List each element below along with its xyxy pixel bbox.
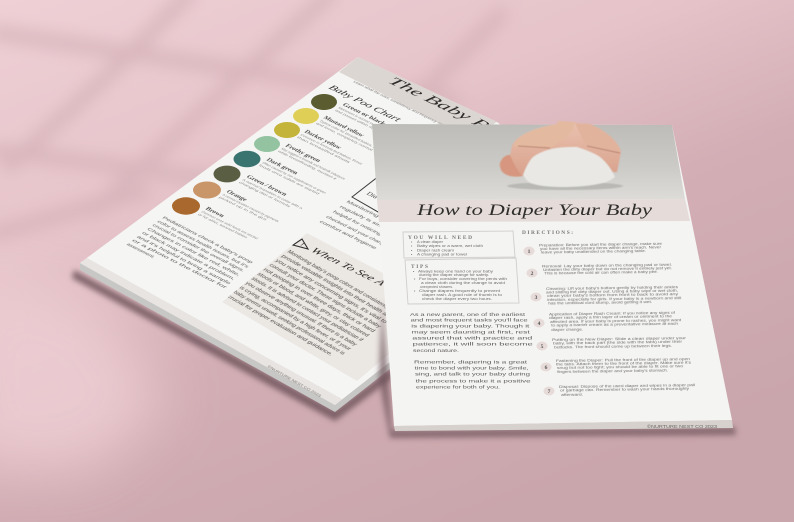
list: tips: • [414, 289, 416, 293]
intro paragraph: and most frequent tasks you'll face [411, 318, 528, 324]
left sheet paragraph: assessment. [125, 242, 156, 260]
left sheet copyright stamp: ©NURTURE NEST CO 2023 [266, 364, 323, 398]
list: tips: a clean cloth during the change to avoid [421, 281, 505, 285]
main title: How to Diaper Your Baby [416, 202, 653, 219]
step 3: and sliding the dirty diaper out. Using a baby wipe or wet cloth, [546, 289, 678, 294]
colour descriptions: Brown [203, 206, 226, 219]
colour descriptions: and passes within 48 hours [334, 109, 387, 135]
colour descriptions: Common once solid foods are started [200, 210, 259, 240]
step 4: diaper rash, apply a thin layer of cream or ointment to the [549, 314, 672, 320]
colour descriptions: while breastfeeding, mention it [277, 150, 337, 180]
reminder paragraph: experience for both of you. [416, 385, 500, 391]
step 3: infection, especially for girls. If your baby is a newborn and still [547, 296, 681, 302]
colour descriptions: foods once solids are started [258, 164, 320, 195]
left sheet paragraph: or a photo to the doctor for [130, 239, 229, 290]
list: supplies [411, 240, 483, 256]
step 2: 2 [531, 271, 534, 277]
photo: baby in a diaper [500, 121, 623, 190]
intro paragraph: assured that with practice and [412, 336, 533, 342]
step 1: Preparation: Before you start the diaper change, make sure [539, 242, 662, 247]
colour descriptions: Green or black [340, 102, 388, 127]
reminder paragraph [414, 360, 531, 391]
list: supplies: Diaper rash cream [417, 248, 454, 252]
step 5: 5 [541, 344, 544, 350]
icon: warning triangle: ! [298, 243, 305, 247]
step 7: afterward. [561, 393, 583, 397]
callout paragraph: Monitoring frequency [344, 200, 413, 234]
left sheet header title: The Baby Poo Chart [384, 75, 569, 169]
colour descriptions: or for older, weaned babies [197, 213, 249, 239]
step 5: buttocks. The front should come up between their legs. [554, 344, 672, 349]
reminder paragraph: sing, and talk to your baby during [415, 371, 531, 377]
left sheet header band [339, 57, 497, 138]
step 6: Fastening the Diaper: Pull the front of the diaper up and open [556, 357, 690, 363]
left sheet paragraph: Pediatricians check a baby's poop [160, 216, 255, 265]
left sheet paragraph [125, 216, 259, 294]
list: supplies: • [411, 248, 413, 252]
right sheet: How to Diaper Your Baby [372, 121, 733, 431]
step 4: 4 [538, 321, 541, 327]
background: window light shadows [0, 0, 505, 235]
photo background [372, 124, 685, 200]
panel text: baby seems unwell, seeking professional advice is [231, 290, 346, 356]
colour descriptions: Dark green [264, 157, 300, 176]
colour descriptions: Common in formula-fed babies, firmer [299, 133, 364, 166]
step 4: to apply a barrier cream as a preventative measure at each [551, 322, 678, 327]
step 7: or garbage can. Remember to wash your hands thoroughly [560, 387, 689, 392]
colour descriptions: picked up in the gut [218, 196, 268, 221]
left sheet: The Baby Poo Chart [80, 57, 500, 412]
step 3: clean your baby's bottom from front to back to avoid any [547, 292, 678, 298]
step 6: snug but not too tight; you should be able to fit one or two [557, 364, 683, 370]
step 6 [540, 357, 691, 374]
step 1 [524, 242, 662, 256]
shadow: under left sheet [72, 270, 392, 421]
colour descriptions: Often caused by iron supplements or green [261, 161, 327, 194]
intro paragraph: As a new parent, one of the earliest [410, 312, 526, 318]
colour descriptions: May suggest a foremilk and hindmilk imbalance [280, 147, 346, 180]
diaper tip callout box: Did You Know [364, 191, 408, 214]
colour descriptions: Green / brown [244, 174, 289, 197]
diaper tip callout box [352, 176, 420, 220]
panel: When To See a Doctor [222, 233, 388, 380]
panel text: not pooping in over three days, thick or hard [261, 268, 376, 334]
reminder paragraph: the process to make it a positive [416, 378, 531, 384]
step 5 [536, 336, 687, 350]
shadow: under right sheet [379, 300, 736, 438]
step 4: affected area. If your baby is prone to rashes, you might want [550, 318, 681, 324]
panel heading: When To See A Doctor [308, 246, 424, 306]
colour descriptions: Typical color for breastfed babies, seedy [318, 119, 384, 153]
list: tips: Change diapers frequently to prevent [419, 289, 500, 293]
callout paragraph: regularly is simple and [338, 205, 406, 239]
panel text: stools or blood, and white, grey, or clay colored [255, 272, 370, 338]
panel text: provide valuable insights into their health and [279, 254, 394, 320]
panel text: is crying, accompanied by a high fever, or if your [237, 286, 352, 352]
list: tips: Always keep one hand on your baby [418, 270, 493, 274]
left sheet paragraph: and it's helpful to bring a sample [135, 235, 233, 286]
list: tips: • [413, 270, 415, 274]
reminder paragraph: time to bond with your baby. Smile, [415, 366, 529, 372]
reminder paragraph: Remember, diapering is a great [414, 360, 528, 366]
step 7 [544, 383, 695, 397]
step 5: Putting on the New Diaper: Slide a clean diaper under your [552, 336, 687, 342]
list: tips: • [414, 277, 416, 281]
colour descriptions: Orange [224, 189, 249, 202]
intro paragraph [410, 312, 533, 354]
step 4: diaper change. [551, 328, 583, 332]
colour descriptions: A normal transition in color with a [241, 178, 305, 210]
step 3: has the umbilical cord stump, avoid getting it wet. [548, 300, 652, 305]
step 4: Application of Diaper Rash Cream: If you notice any signs of [549, 311, 676, 316]
panel text: stools. It is advised to contact your pediatrician if [249, 277, 365, 343]
list: tips [413, 270, 507, 301]
step 2: Unfasten the dirty diaper but do not remove it entirely just yet. [543, 266, 672, 272]
box: tips [405, 258, 519, 304]
colour descriptions: changing diet or formula [238, 181, 292, 208]
list: supplies: • [411, 244, 413, 248]
step 1: 1 [528, 249, 531, 255]
colour descriptions: Meconium is normal in the first days of life [337, 106, 403, 139]
colour descriptions: Darker yellow [302, 129, 343, 150]
list: supplies: A clean diaper [417, 240, 444, 244]
step 1: you have all the necessary items within arm's reach. Never [540, 245, 662, 251]
colour descriptions: than breastfed stools [296, 136, 351, 164]
step 2: Removal: Lay your baby down on the changing pad or towel. [542, 263, 672, 268]
background: lower-left light patch [0, 270, 170, 470]
list: supplies: • [411, 240, 413, 244]
step 4 [534, 311, 681, 332]
callout paragraph: checked and your changes [324, 215, 392, 249]
step 2 [526, 263, 672, 278]
colour swatches [172, 94, 337, 215]
panel text: you observe anything unusual. If there is a baby [243, 281, 358, 347]
icon: warning triangle [293, 239, 308, 249]
callout paragraph [317, 200, 413, 255]
list: supplies: A changing pad or towel [417, 252, 467, 256]
step 6: the tabs. Attach them to the front of the diaper. Make sure it's [556, 361, 691, 366]
left sheet header subtitle: Learn what the color, consistency and frequency mean [352, 80, 449, 128]
panel text: crucial for proper evaluation and guidance. [225, 295, 334, 357]
left sheet thickness edge [80, 263, 395, 412]
step 3: Cleaning: Lift your baby's bottom gently by holding their ankles [546, 285, 678, 291]
panel text: Monitoring baby's poop colors and consistency can [285, 250, 400, 316]
colour descriptions: A normal variation caused by pigments [221, 193, 280, 223]
step 5: baby, with the back part (the side with the tabs) under their [553, 340, 683, 345]
list: supplies: • [411, 252, 413, 256]
title band [377, 199, 690, 222]
step 7: Disposal: Dispose of the used diaper and wipes in a diaper pail [559, 383, 695, 389]
step 6: fingers between the diaper and your baby's stomach. [557, 368, 668, 374]
intro paragraph: second nature. [413, 348, 459, 354]
list: tips: during the diaper change for safety. [419, 273, 489, 277]
intro paragraph: is diapering your baby. Though it [411, 323, 530, 329]
right sheet page [372, 124, 732, 426]
colour descriptions [197, 102, 409, 242]
panel text [228, 250, 386, 356]
list: supplies: Baby wipes or a warm, wet cloth [417, 244, 483, 248]
callout paragraph: comfort and hygiene [317, 220, 378, 251]
heading: directions: DIRECTIONS: [522, 230, 573, 236]
intro paragraph: may seem daunting at first, rest [412, 329, 531, 335]
step 3 [530, 285, 681, 305]
panel text: consult your doctor. These signs include a baby [267, 263, 382, 329]
left sheet paragraph: or black may indicate a problem, [140, 231, 236, 281]
callout paragraph: helpful for noticing shifts [331, 210, 399, 244]
left sheet paragraph: crucial to consider the overall signs. [150, 223, 246, 273]
step 2: This is because the cold air can often make a baby pee. [544, 270, 658, 275]
directions list [524, 242, 695, 397]
list: tips: For boys, consider covering the penis with [419, 277, 507, 281]
right sheet thickness strip [394, 420, 733, 431]
panel text: you notice any concerning signs, it's vital to [273, 259, 388, 325]
left sheet page [80, 57, 600, 405]
list: tips: unexpected showers. [420, 285, 453, 289]
colour descriptions: Frothy green [283, 143, 323, 164]
list: tips: diaper rash. A good rule of thumb is to [422, 293, 502, 297]
colour descriptions: and loose, completely normal [315, 122, 374, 152]
left sheet bottom band [80, 258, 342, 405]
heading: tips: TIPS [411, 264, 428, 270]
left sheet paragraph: color to assess health issues, but it's [155, 220, 251, 269]
left sheet paragraph: Changes in color like red, white, [145, 227, 242, 277]
step 3: 3 [535, 295, 538, 301]
right sheet copyright stamp: ©NURTURE NEST CO 2023 [647, 423, 717, 430]
box: you will need [403, 231, 515, 258]
list: tips: check the diaper every two hours. [422, 297, 492, 301]
step 6: 6 [545, 365, 548, 371]
intro paragraph: patience, it will soon become [413, 342, 533, 348]
heading: you will need: YOU WILL NEED [408, 235, 472, 241]
step 1: leave your baby unattended on the changing table. [541, 249, 646, 254]
chart heading: Baby Poo Chart [326, 83, 404, 123]
colour descriptions: Mustard yellow [321, 115, 366, 138]
step 7: 7 [548, 389, 551, 395]
